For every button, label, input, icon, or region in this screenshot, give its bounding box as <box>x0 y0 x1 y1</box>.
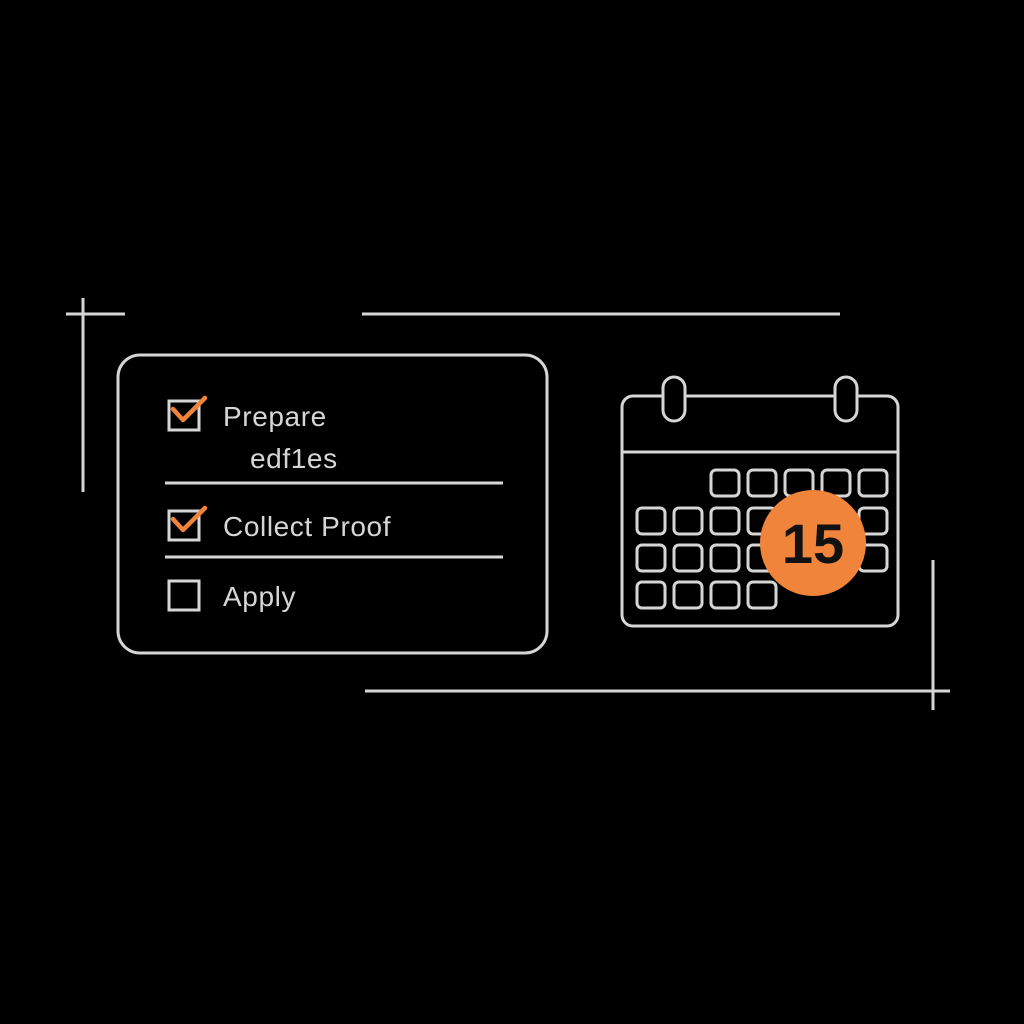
item: prepare: edf1es <box>250 443 338 474</box>
badge: date 15 <box>760 490 866 596</box>
item: prepare: Prepare <box>223 401 327 432</box>
item: apply: Apply <box>223 581 296 612</box>
item: collect proof <box>169 508 391 542</box>
icon: calendar <box>622 377 898 626</box>
badge: date 15: 15 <box>782 512 844 575</box>
item: apply <box>169 581 296 612</box>
item: prepare <box>169 398 338 474</box>
item: collect proof: Collect Proof <box>223 511 391 542</box>
panel: checklist <box>118 355 547 653</box>
